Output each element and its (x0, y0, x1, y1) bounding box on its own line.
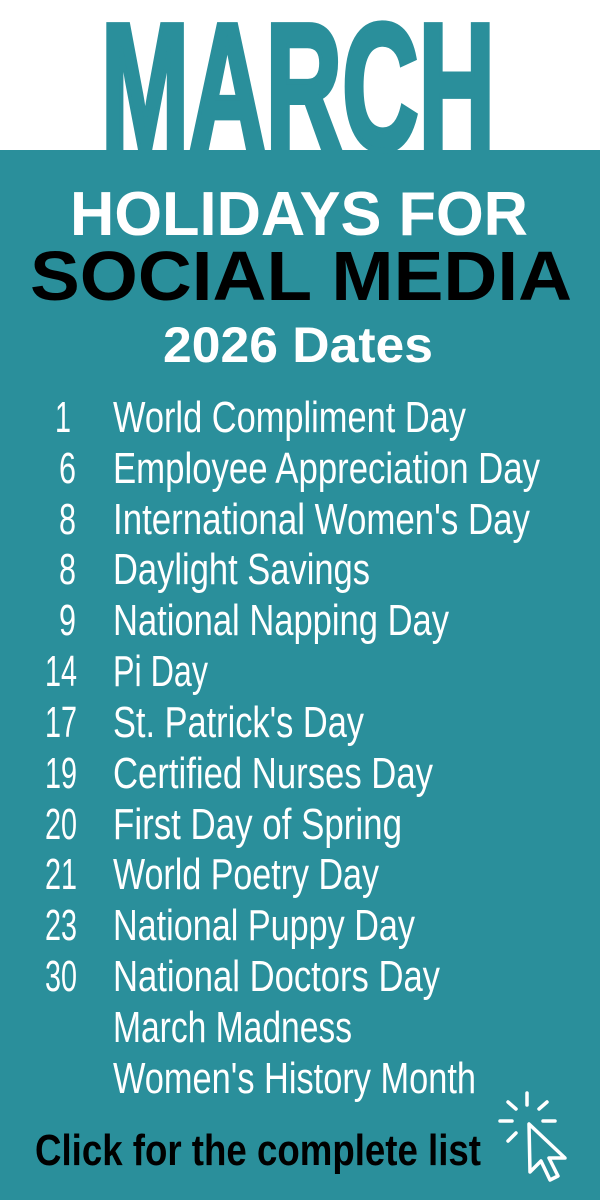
list of dates and holidays: National Puppy Day (113, 901, 415, 950)
call to action text: Click for the complete list (35, 1126, 481, 1175)
heading: holidays for social media: 2026 Dates (163, 317, 433, 373)
list of dates and holidays: First Day of Spring (113, 800, 402, 849)
list of dates and holidays (45, 393, 540, 1103)
list of dates and holidays: World Poetry Day (113, 850, 379, 899)
list of dates and holidays: Certified Nurses Day (113, 749, 433, 798)
list of dates and holidays: 20 (45, 800, 77, 849)
list of dates and holidays: National Napping Day (113, 596, 449, 645)
heading: holidays for social media: HOLIDAYS FOR (70, 180, 528, 249)
list of dates and holidays: World Compliment Day (113, 393, 466, 442)
list of dates and holidays: 19 (45, 749, 77, 798)
list of dates and holidays: Pi Day (113, 647, 208, 696)
list of dates and holidays: Daylight Savings (113, 545, 370, 594)
list of dates and holidays: 21 (45, 850, 77, 899)
list of dates and holidays: 14 (45, 647, 77, 696)
list of dates and holidays: Women's History Month (113, 1054, 476, 1103)
list of dates and holidays: National Doctors Day (113, 952, 440, 1001)
list of dates and holidays: St. Patrick's Day (113, 698, 364, 747)
list of dates and holidays: 9 (59, 596, 76, 645)
list of dates and holidays: 30 (45, 952, 77, 1001)
list of dates and holidays: March Madness (113, 1003, 352, 1052)
heading: holidays for social media: SOCIAL MEDIA (30, 237, 572, 315)
list of dates and holidays: 1 (55, 393, 71, 442)
icon: click cursor (500, 1093, 565, 1180)
list of dates and holidays: 23 (45, 901, 77, 950)
list of dates and holidays: 17 (45, 698, 77, 747)
list of dates and holidays: 8 (59, 545, 76, 594)
list of dates and holidays: 6 (59, 444, 76, 493)
list of dates and holidays: 8 (59, 495, 76, 544)
heading: holidays for social media (30, 180, 572, 373)
